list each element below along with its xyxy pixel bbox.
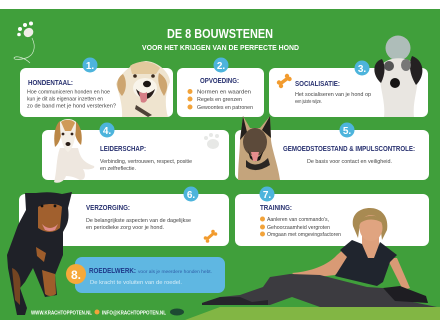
title: DE 8 BOUWSTENEN	[167, 26, 273, 41]
badge 1	[82, 58, 98, 72]
heading 8: ROEDELWERK:	[89, 266, 136, 275]
heading 2: OPVOEDING:	[200, 78, 239, 85]
heading 3: SOCIALISATIE:	[295, 81, 340, 88]
list 2: Gewoontes en patronen	[197, 105, 253, 111]
panel 5: gemoedstoestand	[235, 116, 429, 180]
badge 5	[340, 122, 354, 138]
panel 1: hondentaal	[20, 58, 173, 117]
badge 2: 2.	[217, 61, 225, 72]
badge 3	[354, 60, 370, 76]
text 5: De basis voor contact en veiligheid.	[307, 159, 392, 165]
badge 5: 5.	[343, 126, 351, 137]
heading 7: TRAINING:	[260, 205, 292, 212]
icon: paw with trail	[14, 22, 35, 63]
text 3: een juiste wijze.	[295, 99, 322, 105]
badge 3: 3.	[358, 64, 366, 75]
text 6	[86, 218, 191, 231]
badge 4	[100, 122, 114, 138]
list 7: Omgaan met omgevingsfactoren	[267, 232, 341, 238]
heading 6: VERZORGING:	[86, 205, 130, 212]
panel 2: opvoeding	[177, 58, 264, 117]
heading 1: HONDENTAAL:	[28, 80, 73, 87]
panel 7: training	[235, 186, 429, 246]
text 8: De kracht te voluiten van de roedel.	[90, 280, 182, 286]
badge 4: 4.	[103, 126, 111, 137]
woman	[292, 208, 410, 290]
panel 6: verzorging	[19, 186, 229, 246]
badge 1: 1.	[86, 61, 94, 72]
text 4: Verbinding, vertrouwen, respect, positie	[100, 159, 192, 165]
text 6: De belangrijkste aspecten van de dagelijkse	[86, 218, 191, 224]
subtitle: VOOR HET KRIJGEN VAN DE PERFECTE HOND	[142, 43, 300, 52]
panel 8: roedelwerk	[66, 257, 225, 293]
text 1	[27, 90, 116, 110]
text 4: en zelfreflectie.	[100, 166, 136, 172]
icon: bone	[204, 230, 217, 243]
heading 5: GEMOEDSTOESTAND & IMPULSCONTROLE:	[283, 146, 415, 153]
photo: shepherd	[238, 116, 280, 180]
badge 6	[184, 186, 198, 202]
photo: great dane with ball	[374, 36, 422, 117]
icon: bone	[277, 74, 292, 88]
text 4	[100, 159, 192, 172]
photo: golden retriever	[116, 61, 170, 117]
photo: woman with dog	[202, 208, 437, 310]
badge 7: 7.	[263, 190, 271, 201]
list 2	[188, 89, 253, 111]
list 7: Aanleren van commando's,	[267, 217, 329, 223]
heading 4: LEIDERSCHAP:	[100, 146, 146, 153]
footer contact line: WWW.KRACHTOPPOTEN.NL	[31, 310, 92, 316]
photo: beagle	[54, 119, 94, 183]
badge 8: 8.	[71, 268, 81, 282]
text 1: kun je dit als eigenaar inzetten en	[27, 96, 103, 102]
photo: rottweiler	[7, 192, 72, 315]
list 2: Regels en grenzen	[197, 97, 242, 103]
footer contact line: INFO@KRACHTOPPOTEN.NL	[102, 310, 166, 316]
footer contact line	[31, 308, 184, 316]
text 3	[295, 92, 371, 105]
text 1: Hoe communiceren honden en hoe	[27, 90, 110, 96]
badge 8	[66, 264, 86, 284]
panel 4: leiderschap	[42, 119, 229, 183]
grass	[185, 307, 440, 320]
badge 7	[260, 186, 274, 202]
icon: faded paw	[204, 133, 219, 149]
text 6: en periodieke zorg voor je hond.	[86, 225, 164, 231]
list 2: Normen en waarden	[197, 90, 251, 96]
subheading 8: voor als je meerdere honden hebt.	[138, 269, 212, 275]
badge 6: 6.	[187, 190, 195, 201]
panel 3: socialisatie	[269, 36, 428, 117]
list 7: Gehoorzaamheid vergroten	[267, 225, 330, 231]
dog	[202, 274, 437, 310]
list 7	[260, 216, 341, 238]
text 1: zo de band met je hond versterken?	[27, 104, 116, 110]
text 3: Het socialiseren van je hond op	[295, 92, 371, 98]
